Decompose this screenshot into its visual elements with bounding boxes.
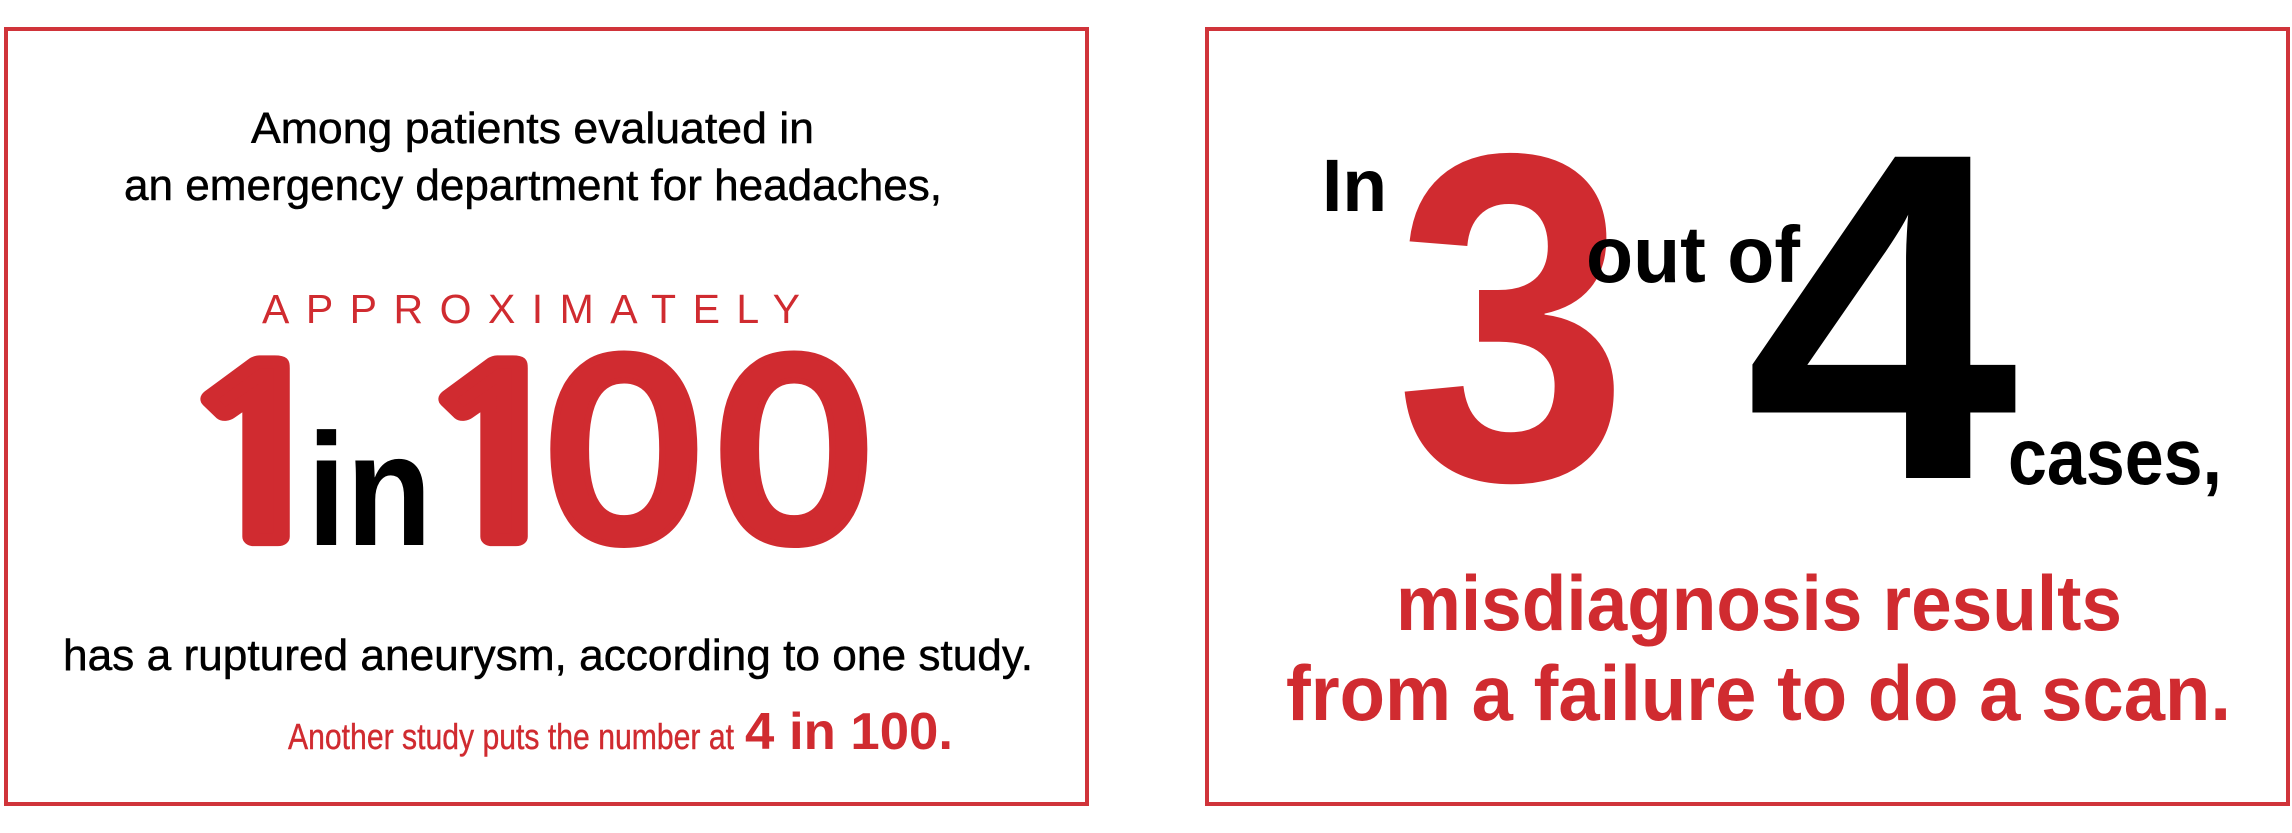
big statistic: 1 in 100 [171,334,878,580]
big statistic: 1 in 100: 1 [171,342,348,574]
intro text: Among patients evaluated in [251,104,814,153]
second study note: Another study puts the number at [288,716,734,757]
big statistic: 1 in 100: in [307,400,432,579]
big statistic: in 3 out of 4 cases: In [1322,144,1387,227]
intro text [124,104,942,210]
panel: emergency department statistic [6,29,1087,804]
conclusion text [1286,559,2231,737]
big statistic: in 3 out of 4 cases: 3 [1395,56,1629,578]
conclusion text: from a failure to do a scan. [1286,649,2231,737]
conclusion text: misdiagnosis results [1396,559,2122,647]
big statistic: in 3 out of 4 cases [1322,55,2222,578]
second study note: 4 in 100. [745,703,953,761]
big statistic: 1 in 100: 00 [538,334,878,580]
study statement: has a ruptured aneurysm, according to one study. [63,631,1033,680]
label: approximately: APPROXIMATELY [262,286,800,332]
intro text: an emergency department for headaches, [124,161,942,210]
second study note [288,703,953,761]
big statistic: in 3 out of 4 cases: 4 [1745,55,2021,577]
panel: misdiagnosis statistic [1207,29,2288,804]
big statistic: in 3 out of 4 cases: cases, [2008,412,2222,501]
big statistic: 1 in 100: 1 [409,342,586,574]
big statistic: in 3 out of 4 cases: out of [1586,210,1800,299]
